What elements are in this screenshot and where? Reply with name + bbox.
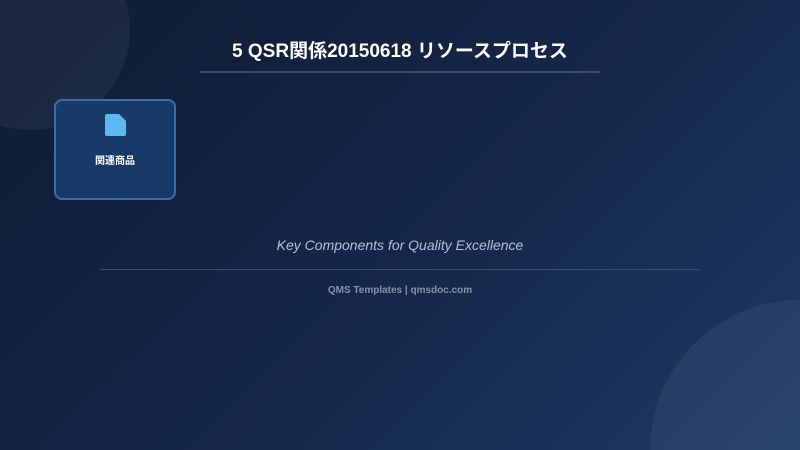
card label: 関連商品	[95, 156, 135, 167]
subtitle: Key Components for Quality Excellence	[277, 237, 523, 253]
footer: QMS Templates | qmsdoc.com	[328, 285, 472, 296]
icon: document	[105, 114, 126, 136]
card: 関連商品	[54, 99, 176, 200]
title: 5 QSR関係20150618 リソースプロセス	[232, 41, 568, 62]
